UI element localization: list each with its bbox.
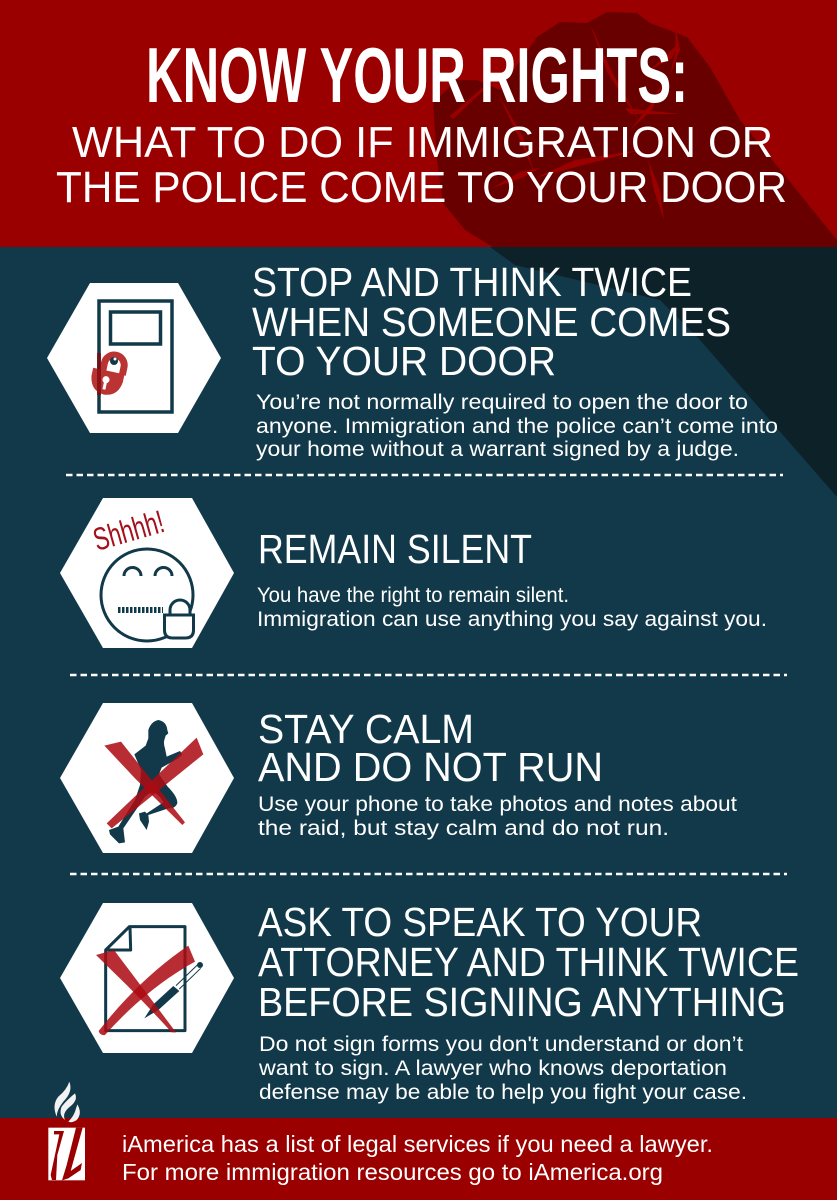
heading: [252, 259, 731, 384]
heading: WHEN SOMEONE COMES: [252, 299, 731, 345]
body text: [256, 390, 778, 461]
body text: Use your phone to take photos and notes about: [258, 792, 737, 816]
heading: AND DO NOT RUN: [258, 744, 603, 790]
subtitle: [56, 119, 787, 212]
body text: the raid, but stay calm and do not run.: [258, 816, 669, 840]
icon: raised fist with long shadow: [433, 12, 837, 247]
heading: TO YOUR DOOR: [252, 338, 556, 384]
panel: stay calm: [60, 703, 737, 853]
body text: [258, 1032, 747, 1104]
body text: [258, 792, 737, 840]
panel: red footer: [0, 1118, 837, 1200]
panel: red header: [0, 0, 837, 247]
panel: remain silent: [60, 498, 767, 648]
icon: crossed-out runner: [60, 703, 234, 853]
heading: STOP AND THINK TWICE: [252, 259, 692, 305]
heading: [258, 899, 799, 1025]
body text: Do not sign forms you don't understand or don’t: [259, 1032, 743, 1056]
subtitle: WHAT TO DO IF IMMIGRATION OR: [72, 119, 773, 167]
heading: REMAIN SILENT: [258, 526, 532, 572]
panel: teal body: [0, 247, 837, 1118]
heading: ATTORNEY AND THINK TWICE: [258, 939, 799, 985]
body text: defense may be able to help you fight your case.: [259, 1080, 747, 1104]
body text: [257, 583, 767, 631]
footer text: iAmerica has a list of legal services if you need a lawyer.: [122, 1131, 713, 1157]
icon: iAmerica torch logo: [48, 1082, 85, 1180]
shadow: fist long shadow on teal: [490, 247, 837, 497]
body text: your home without a warrant signed by a judge.: [256, 437, 739, 461]
icon: zipped face saying Shhhh: Shhhh!: [89, 503, 168, 558]
body text: want to sign. A lawyer who knows deportation: [258, 1056, 727, 1080]
footer text: [122, 1131, 713, 1185]
icon: crossed-out document and pen: [60, 903, 234, 1053]
footer text: For more immigration resources go to iAmerica.org: [122, 1159, 663, 1185]
icon: zipped face saying Shhhh: [60, 498, 234, 648]
icon: door with padlock: [47, 283, 221, 433]
heading: [258, 706, 603, 790]
heading: BEFORE SIGNING ANYTHING: [258, 979, 786, 1025]
body text: Immigration can use anything you say against you.: [257, 607, 767, 631]
panel: ask to speak to attorney: [60, 899, 799, 1104]
heading: STAY CALM: [258, 706, 474, 752]
body text: You have the right to remain silent.: [257, 583, 569, 607]
subtitle: THE POLICE COME TO YOUR DOOR: [56, 164, 787, 212]
body text: anyone. Immigration and the police can’t come into: [256, 414, 778, 438]
body text: You’re not normally required to open the door to: [256, 390, 748, 414]
panel: stop and think twice: [47, 259, 778, 461]
heading: ASK TO SPEAK TO YOUR: [258, 899, 702, 945]
